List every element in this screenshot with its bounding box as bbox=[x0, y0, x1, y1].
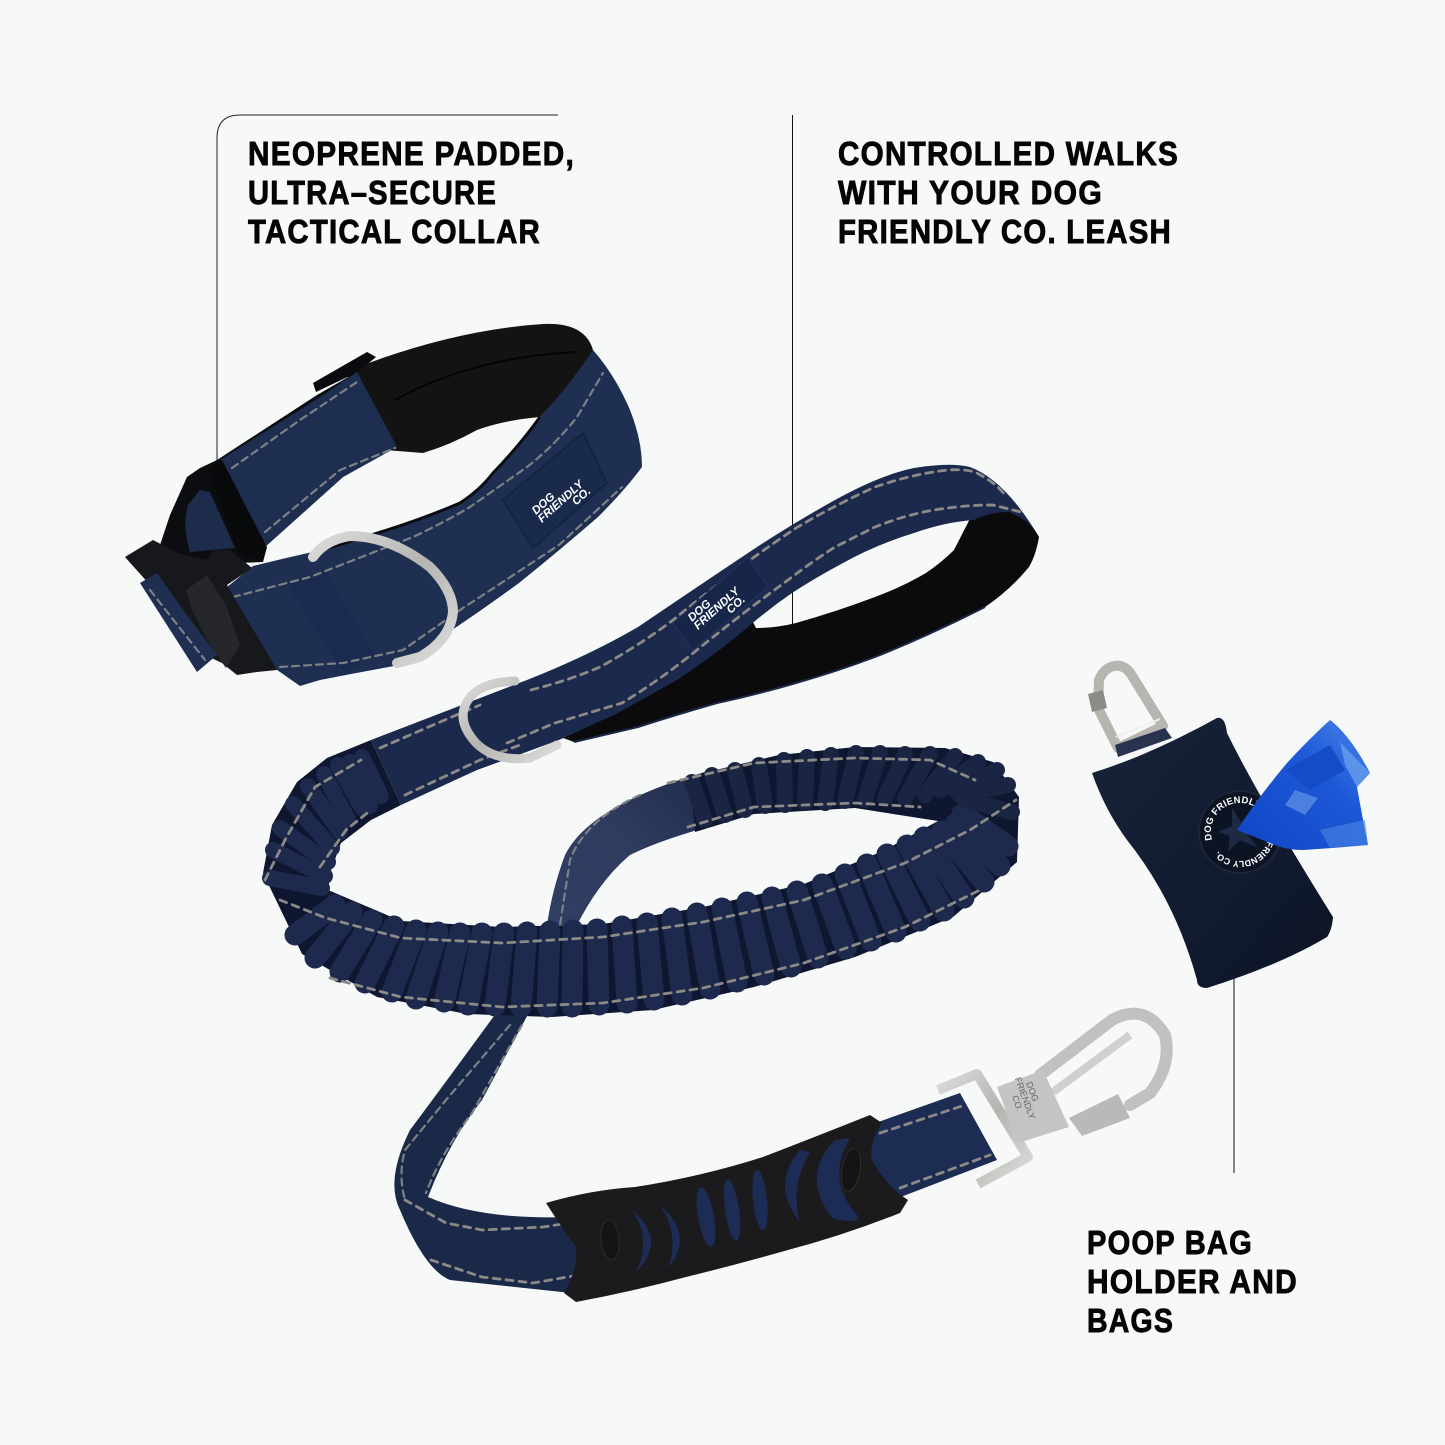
poop bag holder bbox=[1088, 660, 1370, 988]
strap: flat section behind bungee bbox=[547, 772, 715, 925]
heading: leash: FRIENDLY CO. LEASH bbox=[838, 213, 1172, 250]
hook: gate loop bbox=[1040, 1014, 1167, 1105]
heading: leash bbox=[838, 135, 1179, 250]
collar: inner navy patch bbox=[185, 490, 235, 552]
collar: back black edge bbox=[160, 372, 396, 565]
collar illustration bbox=[125, 324, 642, 686]
collar: stitching bbox=[233, 373, 603, 597]
heading: leash: CONTROLLED WALKS bbox=[838, 135, 1179, 172]
collar: black keeper strap bbox=[208, 460, 267, 562]
snap hook hardware bbox=[938, 1014, 1167, 1184]
heading: leash: WITH YOUR DOG bbox=[838, 174, 1103, 211]
heading: poop bag holder bbox=[1087, 1224, 1298, 1339]
bungee: base shape bbox=[263, 740, 1019, 1017]
leash: brand patch: FRIENDLY bbox=[692, 585, 743, 632]
collar: back webbing panel bbox=[220, 372, 397, 547]
bungee: stitching bbox=[280, 800, 1016, 943]
leader line: leash bbox=[792, 115, 794, 643]
hook: swivel loop bbox=[938, 1074, 1028, 1184]
collar: silver D-ring bbox=[313, 536, 453, 663]
holder: webbing tab bbox=[1115, 728, 1172, 757]
collar: brand patch bbox=[503, 433, 607, 548]
collar: brand patch: CO. bbox=[570, 485, 593, 508]
holder: blue bag bbox=[1237, 720, 1370, 850]
heading: collar: NEOPRENE PADDED, bbox=[248, 135, 575, 172]
leash: black neoprene lining bbox=[555, 505, 1039, 742]
lower leash strap bbox=[394, 772, 715, 1295]
holder: round badge: FRIENDLY CO. bbox=[1218, 842, 1273, 868]
collar: metal buckle bbox=[125, 540, 277, 675]
hook: engraved brand: CO. bbox=[1010, 1094, 1025, 1112]
leash handle loop bbox=[371, 465, 1039, 805]
leader line: poop bag holder bbox=[1233, 975, 1235, 1173]
rubber traffic lock bbox=[546, 1115, 908, 1302]
collar: brand patch: DOG bbox=[530, 491, 558, 517]
webbing between lock and swivel bbox=[850, 1093, 997, 1205]
heading: poop bag holder: POOP BAG bbox=[1087, 1224, 1253, 1261]
leash: brand patch: CO. bbox=[725, 594, 748, 616]
heading: collar bbox=[248, 135, 575, 250]
bungee: fabric ribs bottom bbox=[295, 814, 1008, 1007]
strap: descending webbing bbox=[394, 1005, 590, 1295]
leash: stitching bbox=[531, 470, 1005, 690]
hook: engraved brand: DOG bbox=[1024, 1080, 1041, 1103]
holder: round badge: DOG FRIENDLY bbox=[1204, 796, 1258, 840]
heading: poop bag holder: BAGS bbox=[1087, 1302, 1174, 1339]
bungee section bbox=[263, 740, 1019, 1017]
hook: body bbox=[997, 1070, 1069, 1143]
collar: brand patch: FRIENDLY bbox=[536, 478, 587, 525]
leash: silver ring bbox=[463, 681, 557, 759]
collar: neoprene padding bbox=[345, 324, 593, 453]
bungee: fabric ribs left bbox=[270, 757, 381, 888]
leash: brand patch: DOG bbox=[686, 598, 714, 624]
holder: round badge bbox=[1198, 790, 1279, 874]
lock: crescent and slot cut-outs showing strap bbox=[632, 1138, 858, 1272]
hook: engraved brand: FRIENDLY bbox=[1013, 1076, 1037, 1120]
holder: pouch body bbox=[1092, 718, 1333, 988]
leader line: collar bbox=[217, 115, 558, 470]
collar: front band bbox=[227, 350, 642, 686]
leash: brand patch bbox=[673, 557, 768, 650]
bungee: fabric ribs top bbox=[692, 753, 1012, 820]
heading: collar: ULTRA–SECURE bbox=[248, 174, 497, 211]
heading: poop bag holder: HOLDER AND bbox=[1087, 1263, 1298, 1300]
collar: tail webbing bbox=[140, 573, 217, 672]
holder: carabiner bbox=[1098, 666, 1163, 748]
hook: locking barrel bbox=[1069, 1094, 1130, 1136]
collar: upper slider bbox=[313, 352, 376, 392]
leash: handle webbing bbox=[371, 465, 1039, 805]
heading: collar: TACTICAL COLLAR bbox=[248, 213, 541, 250]
